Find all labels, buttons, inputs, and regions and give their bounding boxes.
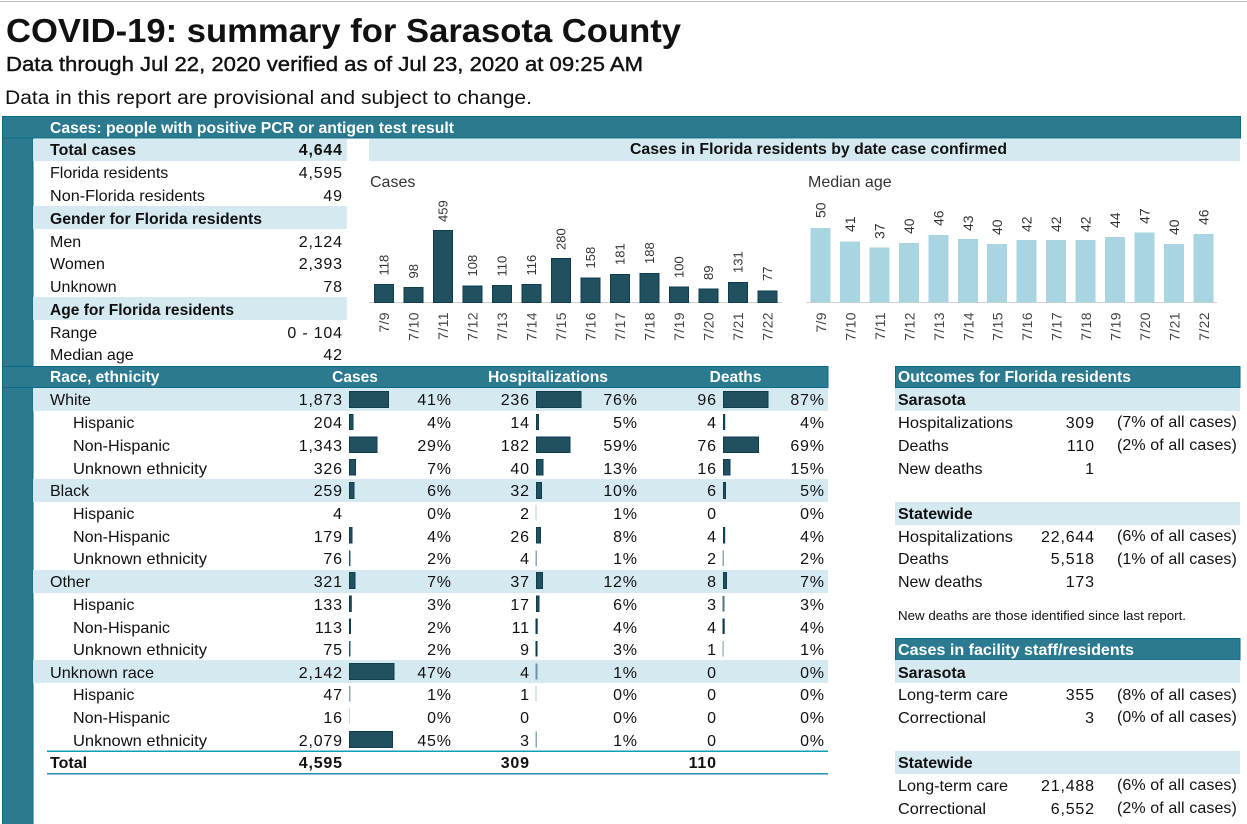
bar chart: cases by date: 7/14 — [524, 312, 540, 341]
cases section header: Cases: people with positive PCR or antigen test result — [50, 120, 454, 137]
bar chart: median age by date: 46 — [930, 210, 946, 226]
bar chart: cases by date: 280 — [554, 228, 568, 250]
row: White: 236 — [501, 392, 530, 409]
row: Other, Unknown ethnicity: 3% — [613, 642, 638, 659]
Statewide correctional: 6,552 — [1051, 801, 1095, 818]
row: Black, Hispanic: 2 — [520, 506, 530, 523]
row: Unknown race, Hispanic: 0% — [613, 687, 638, 704]
age heading: Age for Florida residents — [50, 302, 234, 319]
row: Unknown race, Hispanic: Hispanic — [73, 687, 134, 704]
Statewide new deaths: 173 — [1066, 574, 1095, 591]
Statewide long-term care: 21,488 — [1041, 778, 1095, 795]
bar chart: cases by date: 89 — [701, 266, 716, 280]
panel: cases in facility staff and residents — [895, 638, 1240, 818]
row: Black, Unknown ethnicity — [73, 550, 825, 568]
row: Other, Non-Hispanic — [73, 618, 825, 637]
row: Unknown race: 2,142 — [299, 665, 343, 682]
row: Other: 321 — [314, 574, 343, 591]
row: Unknown race, Hispanic: 47 — [323, 687, 343, 704]
provisional data note: Data in this report are provisional and subject to change. — [5, 88, 532, 109]
bar chart: cases by date: 7/18 — [642, 312, 658, 341]
row: White, Unknown ethnicity: 326 — [314, 461, 343, 478]
bar chart: median age by date: 7/20 — [1137, 312, 1153, 341]
bar chart: cases by date: 7/12 — [464, 312, 480, 341]
row: White, Non-Hispanic: Non-Hispanic — [73, 438, 170, 455]
row: Unknown race, Unknown ethnicity: 45% — [417, 733, 452, 750]
row: Unknown race, Non-Hispanic: 16 — [323, 710, 343, 727]
row: Black, Unknown ethnicity: 2 — [707, 551, 717, 568]
chart section heading — [369, 139, 1240, 161]
Sarasota hospitalizations — [898, 414, 1237, 432]
chart section heading: Cases in Florida residents by date case confirmed — [630, 141, 1007, 158]
title: COVID-19: summary for Sarasota County — [6, 12, 682, 49]
Sarasota long-term care: Long-term care — [898, 687, 1008, 704]
Sarasota long-term care: 355 — [1066, 687, 1095, 704]
bar chart: median age by date: 7/12 — [902, 312, 918, 341]
row: White, Unknown ethnicity: 16 — [697, 461, 717, 478]
median age row: 42 — [323, 347, 343, 364]
row: Black, Non-Hispanic — [73, 528, 825, 546]
row: White, Hispanic: Hispanic — [73, 415, 134, 432]
bar chart: median age by date: 7/18 — [1078, 312, 1094, 341]
bar chart: median age by date: 7/21 — [1166, 312, 1182, 341]
row: Other, Hispanic: 3 — [707, 597, 717, 614]
row: Other, Non-Hispanic: 4% — [613, 620, 638, 637]
row: Black: Black — [50, 483, 90, 500]
row: Unknown race, Unknown ethnicity — [73, 732, 825, 750]
row: White: White — [50, 392, 91, 409]
row: Unknown race: 47% — [417, 665, 452, 682]
bar chart: median age by date: 43 — [960, 215, 976, 231]
Statewide long-term care: Long-term care — [898, 778, 1008, 795]
row: White, Hispanic: 4% — [800, 415, 825, 432]
row: Other, Hispanic: 3% — [800, 597, 825, 614]
Sarasota hospitalizations: (7% of all cases) — [1117, 414, 1237, 431]
facility header — [896, 638, 1240, 660]
row: Unknown race, Non-Hispanic — [73, 708, 825, 727]
Statewide long-term care: (6% of all cases) — [1117, 777, 1237, 794]
row: Unknown race, Unknown ethnicity: 0 — [707, 733, 717, 750]
bar chart: median age by date: 7/9 — [813, 312, 829, 333]
row: Black — [33, 479, 828, 502]
table header: Hospitalizations — [488, 369, 608, 386]
row: Other, Hispanic: 6% — [613, 597, 638, 614]
Statewide deaths: Deaths — [898, 551, 949, 568]
row: White: 87% — [790, 392, 825, 409]
median age chart title: Median age — [808, 174, 892, 191]
Statewide correctional: (2% of all cases) — [1117, 800, 1237, 817]
table header: Cases — [332, 369, 378, 386]
Sarasota deaths: 110 — [1067, 438, 1095, 455]
row: Unknown race, Hispanic: 0% — [800, 687, 825, 704]
bar chart: cases by date: 188 — [642, 242, 657, 264]
bar chart: cases by date: 7/17 — [612, 312, 628, 341]
row: Other, Non-Hispanic: 4% — [800, 620, 825, 637]
row: Black, Unknown ethnicity: 2% — [800, 551, 825, 568]
Sarasota hospitalizations: Hospitalizations — [898, 415, 1013, 432]
row: Black, Unknown ethnicity: 1% — [613, 551, 638, 568]
women row — [50, 256, 343, 273]
row: Other, Hispanic: 133 — [314, 597, 343, 614]
women row: Women — [50, 256, 105, 273]
panel: cases summary — [2, 116, 1240, 364]
bar chart: cases by date: 7/22 — [760, 312, 776, 341]
row: Black, Unknown ethnicity: 2% — [427, 551, 452, 568]
bar chart: cases by date: 110 — [494, 256, 510, 276]
row: Total: 309 — [501, 755, 530, 772]
Sarasota facility heading: Sarasota — [898, 665, 966, 682]
bar chart: median age by date: 47 — [1136, 208, 1152, 224]
unknown gender row: 78 — [323, 279, 343, 296]
row: Other, Non-Hispanic: 4 — [707, 620, 717, 637]
row: Unknown race, Non-Hispanic: 0% — [800, 710, 825, 727]
row: Black, Hispanic: Hispanic — [73, 506, 134, 523]
row: Other, Non-Hispanic: Non-Hispanic — [73, 620, 170, 637]
row: Black: 5% — [800, 483, 825, 500]
bar chart: median age by date: 41 — [842, 216, 858, 232]
row: White, Unknown ethnicity: 13% — [603, 461, 638, 478]
row: Black, Non-Hispanic: 4% — [800, 529, 825, 546]
bar chart: median age by date: 7/16 — [1019, 312, 1035, 341]
row: Unknown race, Unknown ethnicity: 1% — [613, 733, 638, 750]
Statewide long-term care — [898, 777, 1237, 795]
row: White, Hispanic: 5% — [613, 415, 638, 432]
bar chart: cases by date: 7/10 — [406, 312, 422, 341]
Statewide deaths — [898, 551, 1237, 568]
Statewide hospitalizations: 22,644 — [1041, 529, 1095, 546]
bar chart: median age by date — [806, 174, 1217, 341]
Sarasota deaths: (2% of all cases) — [1117, 437, 1237, 454]
row: Black, Unknown ethnicity: Unknown ethnicity — [73, 551, 207, 568]
bar chart: cases by date: 7/11 — [435, 312, 451, 340]
row: Black: 10% — [603, 483, 638, 500]
Sarasota new deaths — [898, 461, 1095, 478]
bar chart: cases by date: 100 — [672, 256, 686, 278]
row: Other, Hispanic: 3% — [427, 597, 452, 614]
bar chart: cases by date: 7/13 — [494, 312, 510, 341]
row: Black, Hispanic — [73, 505, 825, 523]
bar chart: cases by date — [369, 174, 782, 341]
Statewide hospitalizations: (6% of all cases) — [1117, 528, 1237, 545]
row: Black, Hispanic: 0% — [427, 506, 452, 523]
Sarasota facility heading — [895, 660, 1240, 683]
row: White, Non-Hispanic: 1,343 — [299, 438, 343, 455]
men row: 2,124 — [299, 234, 343, 251]
row: White, Unknown ethnicity: Unknown ethnicity — [73, 461, 207, 478]
row: White: 1,873 — [299, 392, 343, 409]
subtitle: data dates: Data through Jul 22, 2020 verified as of Jul 23, 2020 at 09:25 AM — [6, 54, 643, 76]
cases chart title: Cases — [370, 174, 415, 191]
total cases row: Total cases — [50, 142, 136, 159]
bar chart: cases by date: 118 — [376, 255, 392, 276]
bar chart: median age by date: 46 — [1196, 209, 1212, 225]
row: Unknown race, Non-Hispanic: 0 — [520, 710, 530, 727]
row: Other, Unknown ethnicity: 1% — [800, 642, 825, 659]
row: Unknown race, Hispanic: 0 — [707, 687, 717, 704]
Sarasota new deaths: New deaths — [898, 461, 982, 478]
Sarasota outcomes heading — [895, 388, 1240, 411]
Sarasota outcomes heading: Sarasota — [898, 392, 966, 409]
row: White, Hispanic: 14 — [510, 415, 530, 432]
bar chart: cases by date: 7/16 — [582, 312, 598, 341]
row: Black: 6 — [707, 483, 717, 500]
bar chart: median age by date: 40 — [989, 219, 1005, 235]
table header — [2, 366, 828, 388]
row: Other: 12% — [603, 574, 638, 591]
gender heading: Gender for Florida residents — [50, 211, 262, 228]
bar chart: median age by date: 42 — [1048, 216, 1064, 232]
bar chart: median age by date: 7/14 — [960, 312, 976, 341]
row: Other, Non-Hispanic: 2% — [427, 620, 452, 637]
bar chart: median age by date: 7/15 — [990, 312, 1006, 341]
non-florida residents row — [50, 188, 343, 205]
gender heading — [33, 206, 347, 229]
row: Unknown race, Non-Hispanic: 0 — [707, 710, 717, 727]
bar chart: median age by date: 40 — [901, 218, 917, 234]
panel: race and ethnicity table — [2, 366, 828, 774]
Sarasota deaths — [898, 437, 1237, 455]
row: White: 76% — [603, 392, 638, 409]
row: Unknown race, Unknown ethnicity: 2,079 — [299, 733, 343, 750]
row: Black, Hispanic: 4 — [333, 506, 343, 523]
row: White, Hispanic — [73, 414, 825, 432]
outcomes header: Outcomes for Florida residents — [898, 369, 1131, 386]
row: Other, Hispanic: 17 — [510, 597, 530, 614]
men row — [50, 234, 343, 251]
bar chart: median age by date: 37 — [872, 223, 888, 239]
row: Black, Unknown ethnicity: 76 — [323, 551, 343, 568]
Sarasota correctional: 3 — [1085, 710, 1095, 727]
bar chart: median age by date: 7/17 — [1048, 312, 1064, 341]
row: Black, Non-Hispanic: 8% — [613, 529, 638, 546]
bar chart: median age by date: 40 — [1166, 219, 1182, 235]
Sarasota hospitalizations: 309 — [1066, 415, 1095, 432]
row: Black, Non-Hispanic: 179 — [314, 529, 343, 546]
Statewide correctional: Correctional — [898, 801, 986, 818]
row: Other, Unknown ethnicity: 1 — [707, 642, 717, 659]
row: Unknown race: 1% — [613, 665, 638, 682]
Statewide new deaths — [898, 574, 1095, 591]
row: Black: 6% — [427, 483, 452, 500]
row: Unknown race: Unknown race — [50, 665, 154, 682]
men row: Men — [50, 234, 81, 251]
bar chart: cases by date: 131 — [730, 251, 746, 273]
bar chart: cases by date: 7/19 — [671, 312, 687, 341]
Statewide facility heading: Statewide — [898, 755, 973, 772]
row: White — [33, 388, 828, 411]
row: Other, Unknown ethnicity: 2% — [427, 642, 452, 659]
row: White, Non-Hispanic — [73, 437, 825, 455]
bar chart: cases by date: 108 — [465, 255, 480, 276]
Sarasota long-term care: (8% of all cases) — [1117, 687, 1237, 704]
row: Unknown race, Hispanic: 1 — [520, 687, 530, 704]
row: White, Non-Hispanic: 69% — [790, 438, 825, 455]
florida residents row: 4,595 — [299, 165, 343, 182]
row: White, Unknown ethnicity — [73, 460, 825, 478]
bar chart: cases by date: 181 — [612, 243, 628, 265]
row: Other: 37 — [510, 574, 530, 591]
age range row: Range — [50, 325, 97, 342]
table header: Deaths — [710, 369, 761, 386]
bar chart: cases by date: 77 — [760, 267, 775, 281]
bar chart: median age by date: 7/11 — [872, 312, 888, 340]
row: Other: 7% — [427, 574, 452, 591]
bar chart: cases by date: 7/21 — [730, 312, 746, 341]
facility header: Cases in facility staff/residents — [898, 642, 1134, 659]
row: White, Non-Hispanic: 59% — [603, 438, 638, 455]
outcomes header — [896, 366, 1240, 388]
bar chart: cases by date: 98 — [406, 264, 421, 278]
Statewide hospitalizations: Hospitalizations — [898, 529, 1013, 546]
row: Unknown race, Unknown ethnicity: 3 — [520, 733, 530, 750]
row: White: 41% — [417, 392, 452, 409]
row: White, Non-Hispanic: 182 — [501, 438, 530, 455]
women row: 2,393 — [299, 256, 343, 273]
total cases row: 4,644 — [299, 142, 343, 159]
row: Total — [47, 750, 828, 774]
Sarasota long-term care — [898, 687, 1237, 704]
row: Other, Unknown ethnicity: 9 — [520, 642, 530, 659]
bar chart: median age by date: 50 — [812, 202, 828, 218]
bar chart: cases by date: 7/15 — [553, 312, 569, 341]
bar chart: cases by date: 7/9 — [376, 312, 392, 333]
Statewide deaths: 5,518 — [1051, 551, 1095, 568]
bar chart: median age by date: 42 — [1078, 216, 1094, 232]
age range row — [50, 325, 343, 342]
row: Unknown race, Non-Hispanic: 0% — [613, 710, 638, 727]
row: Black, Unknown ethnicity: 4 — [520, 551, 530, 568]
Statewide new deaths: New deaths — [898, 574, 982, 591]
row: White, Hispanic: 204 — [314, 415, 343, 432]
bar chart: cases by date: 7/20 — [700, 312, 716, 341]
Sarasota correctional: (0% of all cases) — [1117, 709, 1237, 726]
median age row: Median age — [50, 347, 134, 364]
row: Unknown race — [33, 660, 828, 683]
bar chart: cases by date: 459 — [436, 200, 450, 222]
Statewide outcomes heading: Statewide — [898, 506, 973, 523]
row: Other, Hispanic — [73, 596, 825, 614]
row: Black, Non-Hispanic: 26 — [510, 529, 530, 546]
bar chart: median age by date: 7/22 — [1196, 312, 1212, 341]
row: Other, Unknown ethnicity: 75 — [323, 642, 343, 659]
median age row — [50, 347, 343, 364]
row: Other: 7% — [800, 574, 825, 591]
row: Unknown race, Non-Hispanic: Non-Hispanic — [73, 710, 170, 727]
Sarasota deaths: Deaths — [898, 438, 949, 455]
Statewide outcomes heading — [895, 502, 1240, 525]
row: Black: 259 — [314, 483, 343, 500]
row: Other: Other — [50, 574, 91, 591]
total cases row — [33, 139, 347, 161]
row: Black, Hispanic: 1% — [613, 506, 638, 523]
row: Other, Unknown ethnicity: Unknown ethnicity — [73, 642, 207, 659]
cases section header — [2, 116, 1240, 138]
row: Other — [33, 570, 828, 593]
bar chart: median age by date: 44 — [1107, 212, 1123, 228]
row: White, Hispanic: 4 — [707, 415, 717, 432]
bar chart: cases by date: 158 — [583, 247, 598, 268]
row: White, Unknown ethnicity: 7% — [427, 461, 452, 478]
row: Unknown race: 0 — [707, 665, 717, 682]
Statewide deaths: (1% of all cases) — [1117, 551, 1237, 568]
bar chart: median age by date: 7/13 — [931, 312, 947, 341]
row: Unknown race: 0% — [800, 665, 825, 682]
row: Total: Total — [50, 755, 87, 772]
row: Unknown race, Unknown ethnicity: Unknown ethnicity — [73, 733, 207, 750]
row: Black: 32 — [510, 483, 530, 500]
row: White, Non-Hispanic: 76 — [697, 438, 717, 455]
bar chart: median age by date: 7/19 — [1108, 312, 1124, 341]
row: Other, Hispanic: Hispanic — [73, 597, 134, 614]
row: Total: 4,595 — [299, 755, 343, 772]
row: Black, Non-Hispanic: Non-Hispanic — [73, 529, 170, 546]
non-florida residents row: 49 — [323, 188, 343, 205]
row: Unknown race, Hispanic — [73, 686, 825, 704]
panel: outcomes for Florida residents — [895, 366, 1240, 623]
row: Black, Non-Hispanic: 4% — [427, 529, 452, 546]
Sarasota new deaths: 1 — [1085, 461, 1095, 478]
row: White, Unknown ethnicity: 40 — [510, 461, 530, 478]
Statewide correctional — [898, 800, 1237, 818]
non-florida residents row: Non-Florida residents — [50, 188, 205, 205]
row: Other: 8 — [707, 574, 717, 591]
florida residents row: Florida residents — [50, 165, 168, 182]
bar chart: median age by date: 42 — [1018, 216, 1034, 232]
row: Unknown race, Unknown ethnicity: 0% — [800, 733, 825, 750]
row: Other, Non-Hispanic: 11 — [512, 620, 530, 637]
Statewide hospitalizations — [898, 528, 1237, 546]
row: Black, Non-Hispanic: 4 — [707, 529, 717, 546]
row: White, Non-Hispanic: 29% — [417, 438, 452, 455]
row: Unknown race: 4 — [520, 665, 530, 682]
row: White, Unknown ethnicity: 15% — [790, 461, 825, 478]
Sarasota correctional — [898, 709, 1237, 727]
age range row: 0 - 104 — [287, 325, 343, 342]
row: Total: 110 — [689, 755, 717, 772]
row: Black, Hispanic: 0% — [800, 506, 825, 523]
age heading — [33, 297, 347, 320]
left sidebar band — [2, 116, 33, 824]
new deaths footnote: New deaths are those identified since last report. — [898, 609, 1186, 623]
florida residents row — [50, 165, 343, 182]
row: Unknown race, Hispanic: 1% — [427, 687, 452, 704]
Statewide facility heading — [895, 751, 1240, 774]
Sarasota correctional: Correctional — [898, 710, 986, 727]
row: Other, Non-Hispanic: 113 — [315, 620, 343, 637]
bar chart: median age by date: 7/10 — [842, 312, 858, 341]
unknown gender row: Unknown — [50, 279, 117, 296]
table header: Race, ethnicity — [50, 369, 160, 386]
row: Other, Unknown ethnicity — [73, 641, 825, 659]
row: White: 96 — [697, 392, 717, 409]
row: Black, Hispanic: 0 — [707, 506, 717, 523]
row: Unknown race, Non-Hispanic: 0% — [427, 710, 452, 727]
row: White, Hispanic: 4% — [427, 415, 452, 432]
unknown gender row — [50, 279, 343, 296]
bar chart: cases by date: 116 — [524, 255, 539, 276]
